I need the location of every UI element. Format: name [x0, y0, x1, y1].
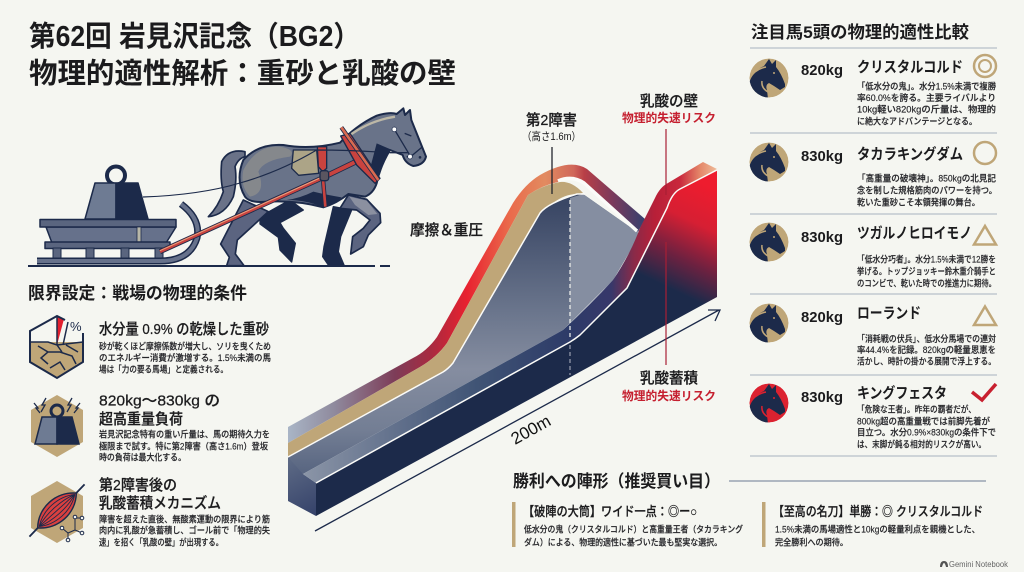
icon: cracked dry sand: [30, 316, 83, 378]
text: lactic heading: 第2障害後の: [99, 476, 177, 494]
heading: boundary conditions: 限界設定：戦場の物理的条件: [28, 283, 247, 303]
label: lactic wall: 乳酸の壁: [640, 93, 698, 110]
label: lactic accumulation: 物理的失速リスク: [622, 388, 716, 403]
description: 率60.0%を誇る。主要ライバルより: [857, 92, 996, 103]
weight: 820kg: [801, 62, 843, 79]
label: lactic wall: [622, 93, 716, 195]
description: 「低水分の鬼」。水分1.5%未満で複勝: [857, 80, 996, 92]
weight: 830kg: [801, 229, 843, 246]
label: second obstacle: 第2障害: [526, 111, 577, 129]
chart: course slope cross-section: [288, 93, 720, 531]
text: lactic body: 障害を超えた直後、無酸素運動の限界により筋: [99, 514, 270, 524]
description: のコンビで、乾いた時での推進力に期待。: [857, 278, 996, 288]
bet body: [524, 524, 743, 548]
description: [857, 333, 996, 366]
icon: muscle and molecule: [21, 477, 93, 544]
bet heading: 【破陣の大筒】ワイド一点：◎ー○: [523, 504, 697, 519]
text: moisture heading: 水分量 0.9% の乾燥した重砂: [99, 321, 269, 338]
heading: recommended bets: 勝利への陣形（推奨買い目）: [513, 472, 720, 491]
text: load body: 極限まで試す。特に第2障害（高さ1.6m）登坂: [99, 440, 268, 452]
description: 目立つ。水分0.9%×830kgの条件下で: [857, 426, 996, 438]
mark: circle: [974, 142, 996, 164]
title: 物理的適性解析：重砂と乳酸の壁: [29, 58, 456, 90]
label: second obstacle: [522, 111, 581, 194]
description: 念を制した規格筋肉のパワーを持つ。: [857, 184, 997, 196]
text: load heading: 超高重量負荷: [99, 411, 183, 428]
text: lactic body: 速」を招く「乳酸の壁」が出現する。: [99, 536, 223, 548]
description: 「低水分巧者」。水分1.5%未満で12勝を: [857, 254, 996, 264]
description: [857, 404, 996, 450]
description: 「消耗戦の伏兵」、低水分馬場での連対: [857, 333, 996, 344]
bet body: 1.5%未満の馬場適性と10kgの軽量利点を親機とした、: [775, 524, 980, 534]
description: 800kg超の高重量戦では前脚先着が: [857, 416, 990, 426]
heading: five horses comparison: 注目馬5頭の物理的適性比較: [751, 23, 969, 42]
title: [29, 21, 456, 90]
icon: cracked dry sand: %: [70, 319, 82, 334]
peak height dashed line: [569, 200, 571, 340]
label: lactic accumulation: [622, 242, 716, 403]
text: moisture body: [99, 340, 271, 374]
panel: win bet: [762, 502, 983, 548]
bet body: ダム）による、物理的適性に基づいた最も堅実な選択。: [524, 536, 722, 548]
text: lactic body: 肉内に乳酸が急蓄積し、ゴール前で「物理的失: [99, 524, 270, 536]
text: moisture body: 砂が乾くほど摩擦係数が増大し、ソリを曳くため: [99, 340, 271, 352]
label: second obstacle: （高さ1.6m）: [522, 129, 581, 143]
text: lactic heading: [99, 476, 221, 512]
slope surface: [288, 194, 640, 516]
icon: horse head gold: [749, 304, 788, 344]
gold sand band: [288, 182, 583, 457]
label: lactic wall: 物理的失速リスク: [622, 110, 716, 125]
text: lactic heading: 乳酸蓄積メカニズム: [99, 494, 221, 512]
weight: 820kg: [801, 309, 843, 326]
panel: Crystal Cold: [749, 55, 996, 126]
mark: check: [972, 384, 996, 400]
mark: triangle: [974, 306, 996, 325]
illustration: horse pulling weighted sled: [28, 108, 426, 266]
text: load body: 岩見沢記念特有の重い斤量は、馬の期待久力を: [99, 428, 270, 440]
label: friction and weight: 摩擦＆重圧: [410, 221, 483, 239]
description: 「高重量の破壊神」。850kgの北見記: [857, 172, 996, 184]
front face with lactic gradient: [316, 170, 717, 516]
description: [857, 254, 996, 288]
ground line: [28, 265, 390, 267]
text: load body: [99, 428, 270, 462]
horse name: タカラキングダム: [857, 145, 963, 163]
description: [857, 80, 996, 126]
description: 率44.4%を記録。820kgの軽量恩恵を: [857, 344, 996, 355]
description: 10kg軽い820kgの斤量は、物理的: [857, 104, 996, 114]
horse name: キングフェスタ: [857, 384, 947, 402]
mark: double circle: [974, 55, 996, 77]
icon: horse head gold: [749, 58, 788, 99]
description: 挙げる。トップジョッキー鈴木重介騎手と: [857, 266, 996, 276]
sled with weight: [37, 166, 198, 261]
bet body: [775, 524, 980, 548]
text: moisture body: 場は「力の要る馬場」と定義される。: [99, 364, 228, 374]
icon: horse head red: [749, 384, 788, 424]
icon: weight with sparks: [31, 395, 83, 457]
weight: 830kg: [801, 148, 843, 165]
panel: lactic acid mechanism: [21, 476, 270, 548]
description: 乾いた重砂こそ本領発揮の舞台。: [857, 196, 980, 208]
panel: wide bet: [512, 502, 743, 548]
panel: dry sand condition: [30, 316, 271, 378]
text: moisture body: のエネルギー消費が激増する。1.5%未満の馬: [99, 352, 271, 363]
text: load heading: 820kg〜830kg の: [99, 392, 220, 410]
panel: Tsugaru no Hiroimono: [749, 222, 996, 288]
panel: Roland: [749, 304, 996, 366]
red friction band: [288, 165, 645, 443]
lactic wall band: [303, 162, 717, 483]
bet heading: 【至高の名刀】単勝：◎ クリスタルコルド: [773, 504, 983, 519]
description: は、末脚が鈍る相対的リスクが高い。: [857, 438, 986, 450]
description: 活かし、時計の掛かる展開で浮上する。: [857, 356, 996, 366]
panel: Takara Kingdom: [749, 142, 997, 208]
icon: horse head gold: [749, 222, 788, 263]
text: load body: 時の負荷は最大化する。: [99, 452, 186, 462]
panel: heavy load condition: [31, 392, 270, 462]
description: に絶大なアドバンテージとなる。: [857, 116, 977, 126]
text: lactic body: [99, 514, 270, 548]
bet body: 完全勝利への期待。: [775, 536, 848, 548]
label: 200m: 200m: [508, 411, 554, 448]
horse name: ツガルノヒロイモノ: [857, 225, 972, 242]
description: 「危険な王者」。昨年の覇者だが、: [857, 404, 976, 414]
weight: 830kg: [801, 389, 843, 406]
horse name: ローランド: [857, 305, 921, 322]
description: [857, 172, 997, 208]
distance arrow: [315, 310, 720, 531]
mark: triangle: [974, 226, 996, 244]
title: 第62回 岩見沢記念（BG2）: [29, 21, 360, 53]
horse: [143, 108, 426, 266]
panel: King Festa: [749, 384, 996, 450]
label: lactic accumulation: 乳酸蓄積: [640, 370, 698, 387]
text: load heading: [99, 392, 220, 428]
watermark: Gemini Notebook: [949, 560, 1009, 569]
bet body: 低水分の鬼（クリスタルコルド）と高重量王者（タカラキング: [524, 524, 743, 534]
horse name: クリスタルコルド: [857, 59, 963, 76]
icon: horse head gold: [749, 142, 788, 183]
